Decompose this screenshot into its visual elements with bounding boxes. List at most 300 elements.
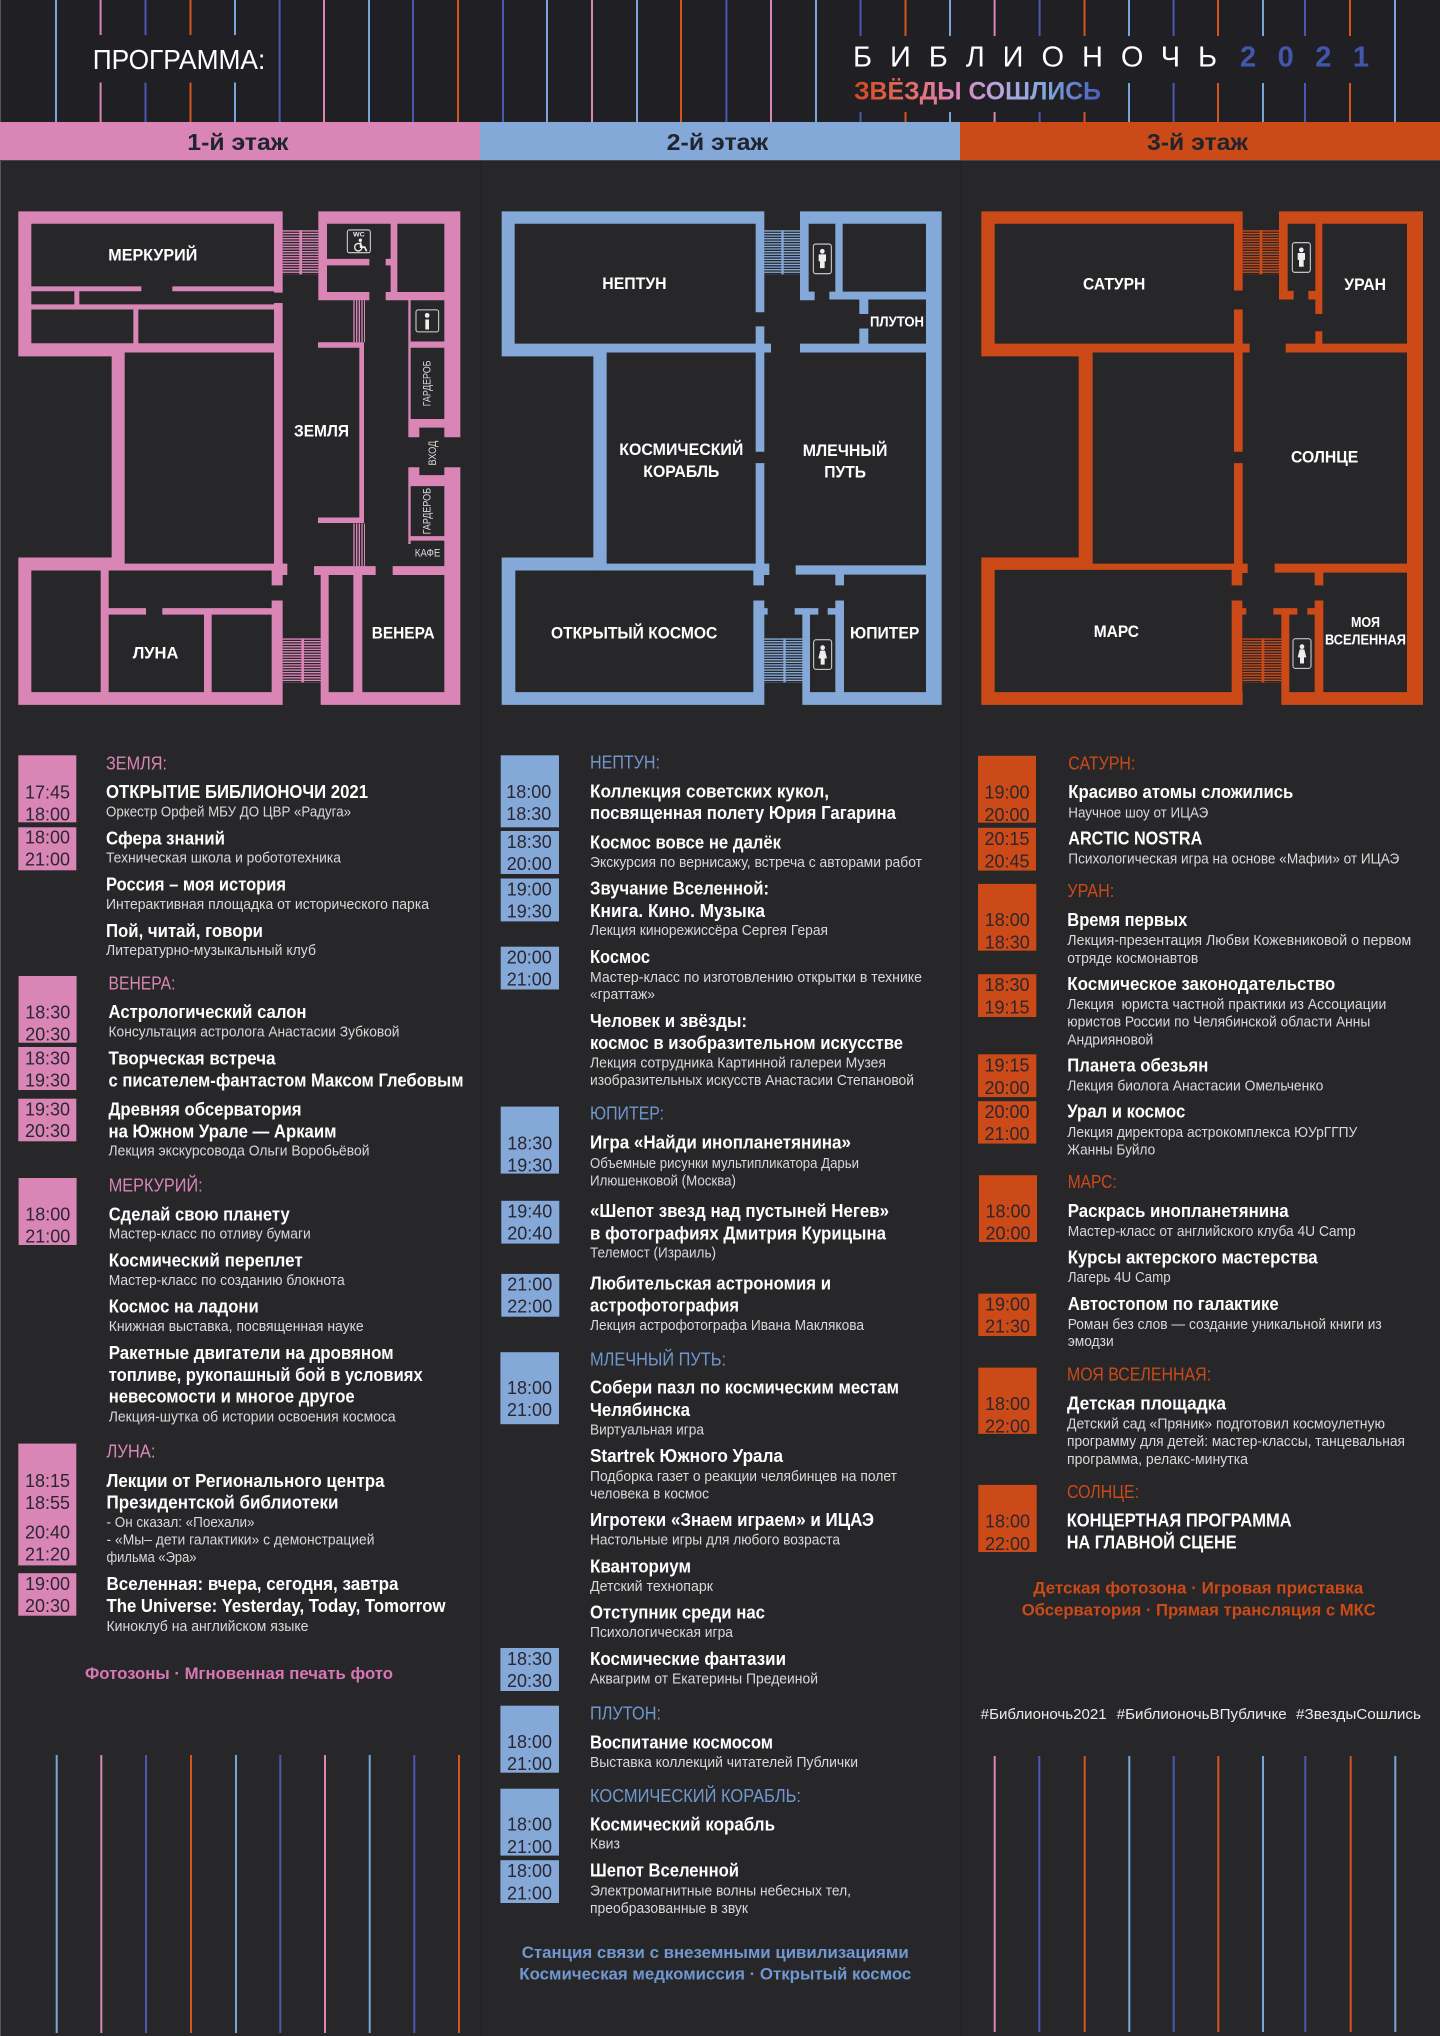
event: Древняя обсерватория: [108, 1100, 302, 1120]
room: Моя вселенная: ВСЕЛЕННАЯ: [1325, 632, 1406, 648]
time badge: 18:00: [986, 1202, 1030, 1222]
room: Космический корабль: КОРАБЛЬ: [643, 462, 719, 481]
time badge: 18:00: [25, 1204, 70, 1224]
section heading: МОЯ ВСЕЛЕННАЯ:: [1067, 1364, 1211, 1384]
event: [590, 879, 828, 939]
event: Вселенная: вчера, сегодня, завтра: [106, 1574, 399, 1594]
event: [590, 1603, 765, 1641]
hashtags: [981, 1706, 1421, 1723]
event: [590, 1732, 858, 1771]
event: «Шепот звезд над пустыней Негев»: [590, 1201, 889, 1221]
event: [1068, 1201, 1356, 1240]
callout: extras 3rd floor: [1022, 1579, 1376, 1620]
event: Урал и космос: [1067, 1102, 1185, 1122]
time badge: 22:00: [507, 1296, 552, 1316]
room: Нептун: НЕПТУН: [602, 274, 667, 293]
floor heading: 1st: 1-й этаж: [187, 129, 289, 155]
event: [106, 828, 341, 867]
time badge: 19:30: [507, 1156, 552, 1176]
event: ОТКРЫТИЕ БИБЛИОНОЧИ 2021: [106, 782, 368, 802]
time badge: [978, 1368, 1037, 1436]
event: Любительская астрономия и: [590, 1274, 831, 1294]
time badge: [18, 1099, 76, 1141]
hashtags: #Библионочь2021: [981, 1706, 1107, 1723]
event: невесомости и многое другое: [109, 1387, 355, 1407]
time badge: 20:00: [984, 805, 1030, 825]
hashtags: #ЗвездыСошлись: [1296, 1706, 1421, 1723]
time badge: 18:00: [507, 1378, 552, 1398]
time badge: 19:40: [507, 1202, 552, 1222]
event: Аквагрим от Екатерины Предеиной: [590, 1671, 818, 1687]
room: Меркурий: МЕРКУРИЙ: [108, 246, 197, 265]
event: [590, 1011, 914, 1089]
time badge: 20:30: [507, 1671, 552, 1691]
time badge: 18:30: [985, 933, 1030, 953]
time badge: 18:30: [507, 1134, 552, 1154]
time badge: 20:00: [984, 1078, 1030, 1098]
bottom stripes: column 3: [995, 1756, 1395, 2032]
event: [590, 1814, 775, 1852]
event: - «Мы– дети галактики» с демонстрацией: [106, 1533, 374, 1549]
event: КОНЦЕРТНАЯ ПРОГРАММА: [1067, 1511, 1292, 1531]
event: [590, 1274, 864, 1334]
time badge: [501, 831, 559, 874]
section: Луна: [18, 1441, 446, 1635]
event: [109, 1204, 311, 1243]
section heading: САТУРН:: [1068, 754, 1135, 774]
event: [590, 1649, 818, 1687]
event: Детский сад «Пряник» подготовил космоулетную: [1067, 1416, 1385, 1432]
time badge: [18, 827, 76, 870]
subtitle: Звёзды сошлись: ЗВЁЗДЫ СОШЛИСЬ: [854, 77, 1101, 105]
event: Психологическая игра: [590, 1625, 733, 1641]
time badge: 18:00: [25, 804, 70, 824]
callout: photo zones: Фотозоны · Мгновенная печать фото: [85, 1664, 393, 1683]
time badge: 19:30: [507, 902, 552, 922]
section: Космический корабль: [500, 1785, 851, 1917]
event: Пой, читай, говори: [106, 921, 263, 941]
event: программа, релакс-минутка: [1067, 1452, 1248, 1468]
time badge: 18:00: [507, 1815, 552, 1835]
event: эмодзи: [1068, 1334, 1114, 1350]
room: Солнце: СОЛНЦЕ: [1291, 448, 1358, 467]
section heading: УРАН:: [1067, 881, 1114, 901]
section: Меркурий: [19, 1174, 423, 1426]
room: Млечный путь: МЛЕЧНЫЙ: [803, 441, 887, 460]
time badge: 21:00: [984, 1124, 1030, 1144]
time badge: 20:40: [507, 1223, 552, 1243]
room: Космический корабль: [619, 440, 743, 481]
time badge: [978, 974, 1036, 1018]
time badge: [978, 1485, 1037, 1554]
plan walls and stairs: [18, 211, 460, 705]
event: The Universe: Yesterday, Today, Tomorrow: [106, 1596, 446, 1616]
time badge: 22:00: [985, 1534, 1030, 1554]
time badge: [978, 884, 1036, 953]
time badge: [978, 1294, 1036, 1336]
time badge: [18, 1573, 76, 1616]
time badge: 18:00: [985, 910, 1030, 930]
event: топливе, рукопашный бой в условиях: [109, 1365, 423, 1385]
event: Лекция юриста частной практики из Ассоциации: [1067, 997, 1386, 1013]
event: Отступник среди нас: [590, 1603, 765, 1623]
event: Время первых: [1067, 910, 1187, 930]
time badge: 20:00: [507, 854, 552, 874]
header: [56, 0, 1395, 122]
time badge: [19, 1178, 77, 1246]
floor plan: 1st floor: [18, 211, 460, 705]
time badge: [978, 1054, 1036, 1098]
event: Собери пазл по космическим местам: [590, 1378, 899, 1398]
time badge: 18:30: [25, 1048, 70, 1068]
event: Сделай свою планету: [109, 1204, 290, 1224]
room: Земля: ЗЕМЛЯ: [294, 422, 349, 441]
event: Андрияновой: [1067, 1033, 1153, 1049]
time badge: 18:00: [506, 782, 551, 802]
time badge: 21:00: [25, 1226, 70, 1246]
room: Моя вселенная: МОЯ: [1351, 615, 1380, 631]
event: [590, 1201, 889, 1261]
floor plan: 3rd floor: [981, 211, 1423, 705]
event: Лекция-презентация Любви Кожевниковой о первом: [1067, 933, 1411, 949]
event: [590, 781, 897, 823]
time badge: [18, 1444, 76, 1565]
time badge: 20:00: [986, 1224, 1030, 1244]
section: Сатурн: [978, 754, 1399, 872]
time badge: 20:30: [25, 1024, 70, 1044]
section heading: КОСМИЧЕСКИЙ КОРАБЛЬ:: [590, 1785, 801, 1806]
event: [590, 1510, 874, 1548]
event: Выставка коллекций читателей Публички: [590, 1755, 858, 1771]
time badge: 20:45: [984, 852, 1030, 872]
time badge: [19, 976, 77, 1044]
event: Подборка газет о реакции челябинцев на полет: [590, 1469, 897, 1485]
time badge: 18:30: [507, 1649, 552, 1669]
event: юристов России по Челябинской области Анны: [1067, 1015, 1370, 1031]
event: [109, 1343, 423, 1426]
event: Лекция сотрудника Картинной галереи Музея: [590, 1056, 886, 1072]
event: Киноклуб на английском языке: [106, 1619, 309, 1635]
event: Книга. Кино. Музыка: [590, 901, 766, 921]
section: Плутон: [500, 1704, 858, 1774]
time badge: [978, 828, 1036, 872]
section heading: ВЕНЕРА:: [108, 973, 176, 993]
section heading: ПЛУТОН:: [590, 1704, 661, 1724]
event: [1068, 1294, 1382, 1350]
event: Экскурсия по вернисажу, встреча с авторами работ: [590, 855, 922, 871]
room: Моя вселенная: [1325, 615, 1406, 648]
event: Лекции от Регионального центра: [106, 1471, 385, 1491]
label: entrance: ВХОД: [427, 440, 439, 466]
time badge: 20:30: [25, 1596, 70, 1616]
section: Земля: [18, 753, 429, 959]
time badge: 21:00: [507, 970, 552, 990]
time badge: [501, 755, 559, 827]
time badge: [500, 1648, 559, 1691]
time badge: [501, 878, 559, 922]
event: Планета обезьян: [1067, 1056, 1208, 1076]
time badge: 21:00: [507, 1274, 552, 1294]
event: Лекция астрофотографа Ивана Маклякова: [590, 1318, 864, 1334]
event: Startrek Южного Урала: [590, 1446, 784, 1466]
event: Игра «Найди инопланетянина»: [590, 1133, 851, 1153]
floor heading: 1st: [0, 122, 480, 160]
time badge: 18:55: [25, 1493, 70, 1513]
event: Детский технопарк: [590, 1579, 714, 1595]
panel: 2nd floor: [480, 122, 960, 1984]
event: [106, 782, 368, 820]
event: на Южном Урале — Аркаим: [108, 1121, 336, 1141]
floor heading: 2nd: 2-й этаж: [667, 129, 769, 155]
plan walls and stairs: [981, 211, 1423, 705]
section heading: МАРС:: [1068, 1172, 1117, 1192]
plan walls and stairs: [502, 211, 942, 705]
event: Коллекция советских кукол,: [590, 781, 829, 801]
event: Космический переплет: [109, 1250, 303, 1270]
time badge: [501, 1201, 559, 1244]
event: Автостопом по галактике: [1068, 1294, 1279, 1314]
section heading: МЛЕЧНЫЙ ПУТЬ:: [590, 1348, 726, 1369]
time badge: 19:00: [985, 1294, 1030, 1314]
event: Курсы актерского мастерства: [1068, 1248, 1319, 1268]
event: [106, 1574, 446, 1635]
event: космос в изобразительном искусстве: [590, 1033, 903, 1053]
time badge: 19:15: [984, 1056, 1030, 1076]
time badge: 20:00: [984, 1102, 1030, 1122]
event: [108, 1048, 464, 1090]
event: программу для детей: мастер-классы, танцевальная: [1067, 1434, 1405, 1450]
event: Интерактивная площадка от исторического парка: [106, 897, 429, 913]
event: «граттаж»: [590, 987, 655, 1003]
event: Лагерь 4U Camp: [1068, 1270, 1171, 1286]
section heading: НЕПТУН:: [590, 752, 660, 772]
header stripes: [56, 0, 1395, 122]
event: Консультация астролога Анастасии Зубковой: [108, 1024, 400, 1040]
section: Уран: [978, 881, 1411, 1158]
icon: men's room: [1292, 243, 1310, 272]
time badge: 18:30: [506, 804, 551, 824]
callout: extras 2nd floor: [519, 1943, 911, 1984]
event: Квиз: [590, 1836, 620, 1852]
event: [106, 921, 316, 959]
icon: women's room: [814, 640, 832, 669]
event: Мастер-класс по изготовлению открытки в технике: [590, 970, 922, 986]
event: Лекция биолога Анастасии Омельченко: [1067, 1078, 1323, 1094]
time badge: [500, 1352, 559, 1424]
event: Ракетные двигатели на дровяном: [109, 1343, 394, 1363]
section heading: МЕРКУРИЙ:: [109, 1174, 203, 1195]
event: [590, 1378, 899, 1438]
time badge: [500, 1706, 559, 1774]
event: посвященная полету Юрия Гагарина: [590, 803, 897, 823]
time badge: [500, 1860, 559, 1903]
time badge: 18:30: [25, 1002, 70, 1022]
section: Венера: [18, 973, 464, 1160]
event: Жанны Буйло: [1067, 1142, 1155, 1158]
time badge: 21:00: [507, 1754, 552, 1774]
section heading: ЮПИТЕР:: [590, 1104, 664, 1124]
room: Млечный путь: ПУТЬ: [824, 462, 866, 482]
time badge: 21:20: [25, 1545, 70, 1565]
event: Шепот Вселенной: [590, 1861, 739, 1881]
event: [590, 832, 922, 871]
time badge: [18, 755, 76, 824]
room: Луна: ЛУНА: [133, 644, 178, 663]
event: [590, 1861, 851, 1917]
time badge: 17:45: [25, 783, 70, 803]
event: Астрологический салон: [108, 1002, 306, 1022]
event: отряде космонавтов: [1067, 951, 1198, 967]
event: Космический корабль: [590, 1814, 775, 1834]
time badge: 18:00: [985, 1512, 1030, 1532]
section heading: ЛУНА:: [106, 1441, 156, 1461]
event: Звучание Вселенной:: [590, 879, 769, 899]
icon: men's room: [813, 244, 831, 274]
time badge: 19:00: [25, 1574, 70, 1594]
event: Мастер-класс по отливу бумаги: [109, 1227, 311, 1243]
title: Библионочь: БИБЛИОНОЧЬ: [853, 42, 1217, 74]
event: преобразованные в звук: [590, 1901, 749, 1917]
event: человека в космос: [590, 1487, 709, 1503]
room: Сатурн: САТУРН: [1083, 274, 1145, 294]
time badge: 18:00: [25, 828, 70, 848]
room: Юпитер: ЮПИТЕР: [850, 624, 919, 643]
time badge: 19:30: [25, 1099, 70, 1119]
time badge: [978, 1101, 1036, 1144]
event: Мастер-класс по созданию блокнота: [109, 1273, 345, 1289]
event: Сфера знаний: [106, 828, 225, 848]
event: Настольные игры для любого возраста: [590, 1532, 840, 1548]
section: Нептун: [501, 752, 922, 1089]
time badge: 22:00: [985, 1416, 1030, 1436]
event: Россия – моя история: [106, 875, 286, 895]
event: Лекция-шутка об истории освоения космоса: [109, 1410, 396, 1426]
event: Кванториум: [590, 1556, 691, 1576]
time badge: 21:00: [507, 1400, 552, 1420]
event: [590, 1133, 859, 1190]
hashtags: #БиблионочьВПубличке: [1117, 1706, 1287, 1723]
time badge: 18:30: [507, 832, 552, 852]
event: Объемные рисунки мультипликатора Дарьи: [590, 1156, 859, 1172]
event: [109, 1250, 345, 1289]
event: [1067, 1102, 1358, 1158]
event: [1067, 1056, 1323, 1094]
event: Воспитание космосом: [590, 1732, 773, 1752]
event: - Он сказал: «Поехали»: [106, 1515, 255, 1531]
event: Творческая встреча: [108, 1048, 276, 1068]
event: Электромагнитные волны небесных тел,: [590, 1884, 851, 1900]
time badge: [979, 1175, 1037, 1244]
time badge: 21:30: [985, 1316, 1030, 1336]
section heading: ЗЕМЛЯ:: [106, 753, 167, 773]
time badge: 19:00: [507, 879, 552, 899]
panel: 1st floor: [0, 122, 480, 2033]
callout: extras 3rd floor: Обсерватория · Прямая трансляция с МКС: [1022, 1601, 1376, 1620]
event: Телемост (Израиль): [590, 1245, 716, 1261]
event: Космос вовсе не далёк: [590, 832, 782, 852]
event: [1067, 974, 1386, 1049]
icon: accessible WC: WC: [353, 231, 365, 239]
label: cloakroom 2: ГАРДЕРОБ: [422, 488, 434, 534]
time badge: 21:00: [507, 1883, 552, 1903]
label: cafe: КАФЕ: [415, 547, 440, 559]
event: [108, 1002, 400, 1040]
floor heading: 3rd: 3-й этаж: [1147, 129, 1249, 155]
icon: women's room: [1293, 639, 1311, 668]
event: [106, 1471, 385, 1566]
title: programme: ПРОГРАММА:: [93, 44, 265, 75]
callout: extras 2nd floor: Космическая медкомиссия · Открытый космос: [519, 1965, 911, 1984]
time badge: 20:40: [25, 1523, 70, 1543]
floor plan: 2nd floor: [502, 211, 942, 705]
event: Красиво атомы сложились: [1068, 782, 1293, 802]
event: Литературно-музыкальный клуб: [106, 943, 316, 959]
time badge: [18, 1047, 76, 1091]
time badge: 18:00: [985, 1394, 1030, 1414]
event: Космос на ладони: [109, 1297, 259, 1317]
event: [1068, 829, 1399, 868]
room: Открытый космос: ОТКРЫТЫЙ КОСМОС: [551, 624, 717, 643]
icon: info: [416, 310, 439, 332]
section: Марс: [978, 1172, 1382, 1350]
time badge: 21:00: [507, 1837, 552, 1857]
section: Солнце: [978, 1482, 1292, 1554]
event: Книжная выставка, посвященная науке: [109, 1319, 364, 1335]
time badge: 19:00: [984, 783, 1030, 803]
time badge: 21:00: [25, 850, 70, 870]
time badge: 18:00: [507, 1732, 552, 1752]
panel: 3rd floor: [960, 122, 1440, 2032]
time badge: 18:00: [507, 1861, 552, 1881]
time badge: 20:15: [984, 829, 1030, 849]
event: в фотографиях Дмитрия Курицына: [590, 1223, 887, 1243]
event: фильма «Эра»: [106, 1550, 197, 1566]
event: Оркестр Орфей МБУ ДО ЦВР «Радуга»: [106, 804, 351, 820]
event: Научное шоу от ИЦАЭ: [1068, 806, 1208, 822]
event: Техническая школа и робототехника: [106, 851, 341, 867]
time badge: 18:15: [25, 1471, 70, 1491]
event: Лекция директора астрокомплекса ЮУрГГПУ: [1067, 1125, 1358, 1141]
time badge: [978, 756, 1036, 825]
event: Космические фантазии: [590, 1649, 786, 1669]
event: НА ГЛАВНОЙ СЦЕНЕ: [1067, 1532, 1237, 1552]
time badge: 19:30: [25, 1071, 70, 1091]
time badge: 19:15: [984, 998, 1030, 1018]
time badge: [500, 1789, 559, 1857]
room: Космический корабль: КОСМИЧЕСКИЙ: [619, 440, 743, 459]
time badge: 18:30: [984, 975, 1030, 995]
event: [1067, 1393, 1405, 1468]
event: Игротеки «Знаем играем» и ИЦАЭ: [590, 1510, 874, 1530]
event: Виртуальная игра: [590, 1422, 704, 1438]
event: Лекция экскурсовода Ольги Воробьёвой: [108, 1144, 370, 1160]
section heading: СОЛНЦЕ:: [1067, 1482, 1139, 1502]
event: [1067, 910, 1411, 967]
event: астрофотография: [590, 1296, 739, 1316]
event: [1067, 1511, 1292, 1552]
time badge: [501, 1107, 559, 1176]
callout: extras 3rd floor: Детская фотозона · Игровая приставка: [1033, 1579, 1364, 1598]
event: Детская площадка: [1067, 1393, 1227, 1413]
event: [1068, 1248, 1319, 1286]
event: Лекция кинорежиссёра Сергея Герая: [590, 923, 828, 939]
event: изобразительных искусств Анастасии Степановой: [590, 1073, 914, 1089]
room: Плутон: ПЛУТОН: [870, 315, 924, 331]
floor heading: 2nd: [480, 122, 960, 160]
event: [106, 875, 429, 913]
room: Венера: ВЕНЕРА: [372, 624, 435, 643]
room: Млечный путь: [803, 441, 887, 482]
